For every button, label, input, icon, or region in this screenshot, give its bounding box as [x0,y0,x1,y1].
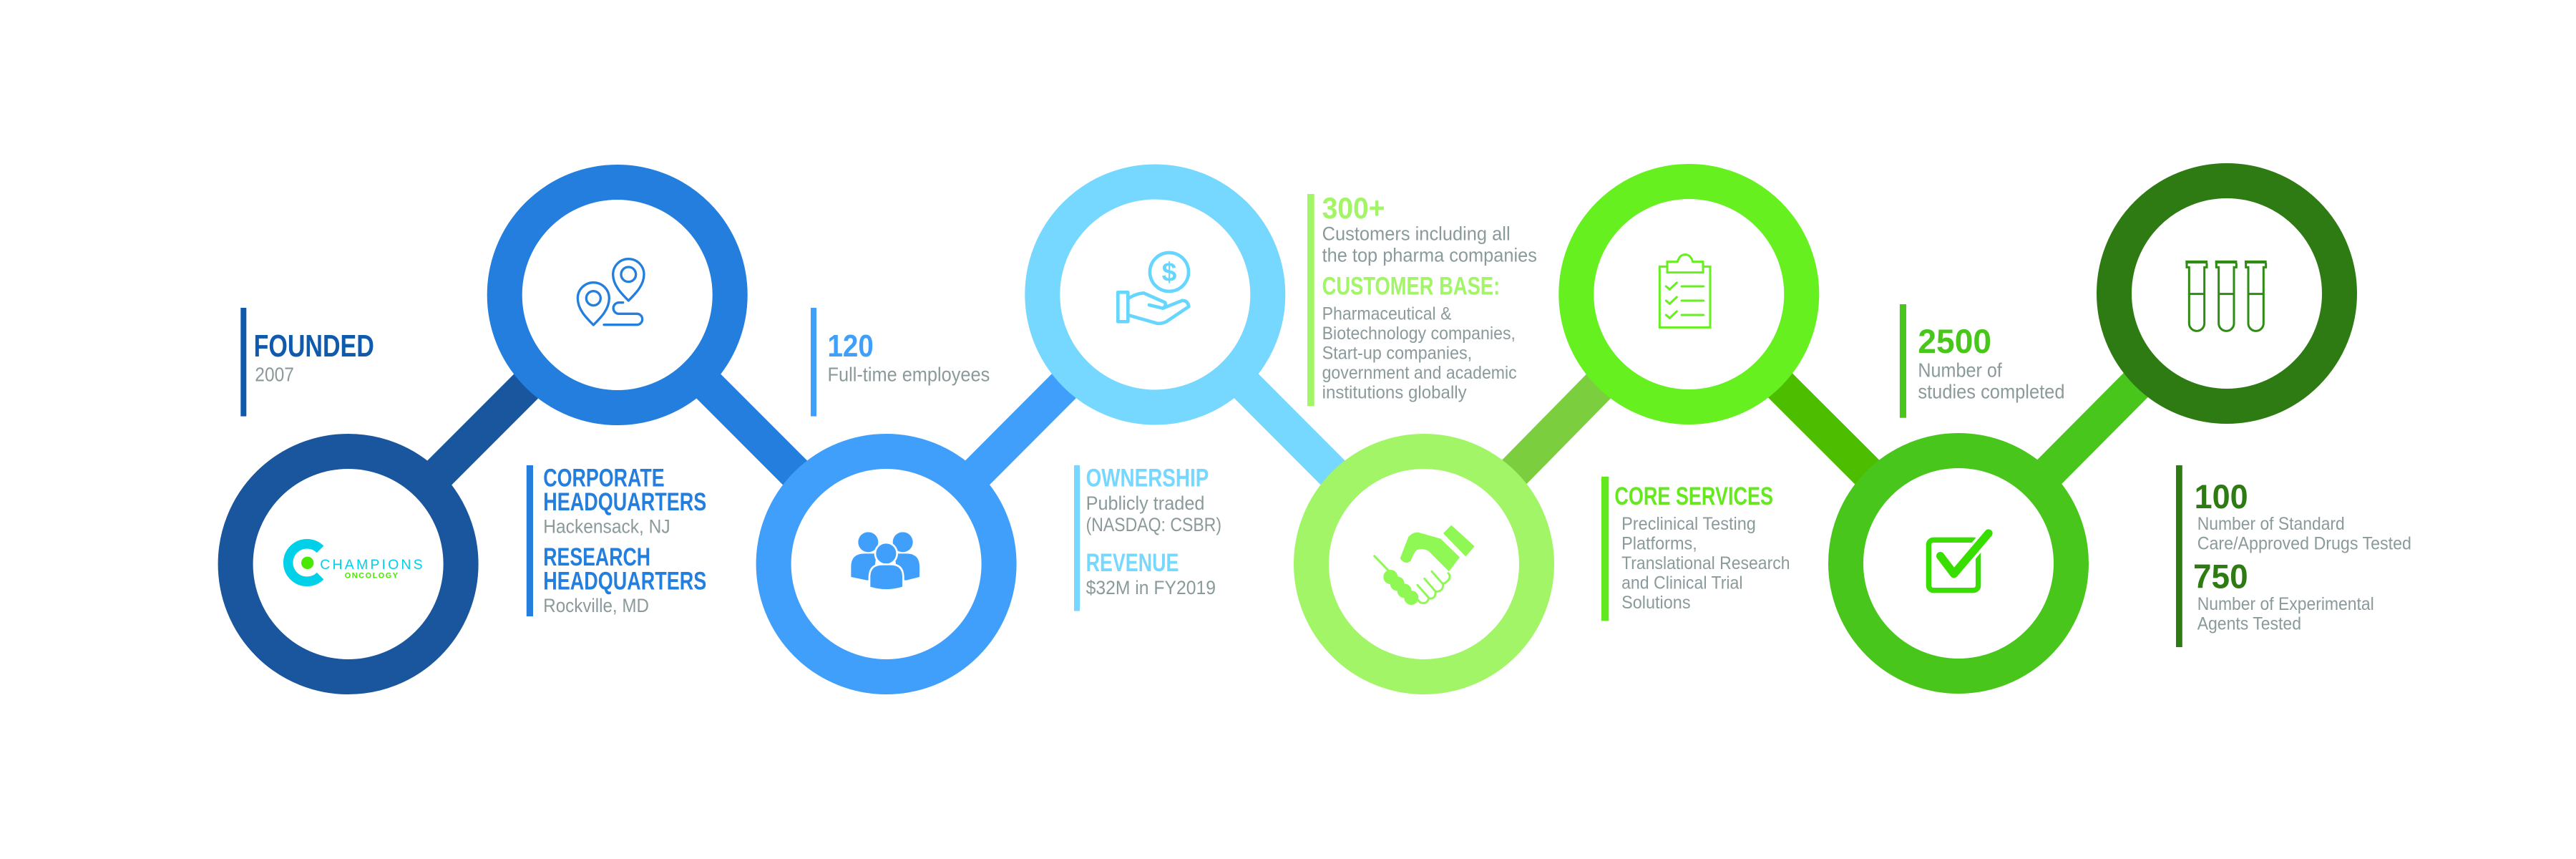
text block: studies: studies completed [1918,381,2065,403]
text block: core services: CORE SERVICES [1614,482,1773,510]
text block: studies: Number of [1918,359,2002,381]
text block: studies [1900,304,2065,418]
text block: customers: Customers including all [1322,223,1511,245]
text block: customers: CUSTOMER BASE: [1322,273,1500,301]
text block: ownership and revenue: (NASDAQ: CSBR) [1086,514,1221,535]
text block: headquarters [527,465,706,616]
text block: ownership and revenue: $32M in FY2019 [1086,577,1216,598]
icon: hand with coin: $ [1162,257,1177,287]
text block: core services: Translational Research [1621,553,1790,573]
text block: drugs tested: 750 [2193,557,2248,595]
text block: headquarters: HEADQUARTERS [543,488,706,516]
connector: circle 5 to 6 [1424,294,1689,564]
text block: headquarters: Hackensack, NJ [543,515,670,537]
text block: headquarters: HEADQUARTERS [543,567,706,596]
text block: customers: Biotechnology companies, [1322,324,1516,344]
connector: circle 1 to 2 [348,295,618,564]
text block: headquarters: CORPORATE [543,465,665,492]
text block: ownership and revenue: REVENUE [1086,549,1179,577]
icon: people group [851,532,919,590]
logo: Champions Oncology: CHAMPIONS [320,557,423,573]
text block: customers: Start-up companies, [1322,344,1472,364]
text block: core services: Solutions [1621,593,1691,613]
ring: logo circle [235,451,461,677]
connector: circle 2 to 3 [618,295,887,564]
icon: hand with coin [1118,253,1189,324]
ring: services circle [1576,182,1802,407]
text block: core services: Platforms, [1621,533,1697,553]
text block: ownership and revenue: OWNERSHIP [1086,465,1209,492]
text block: drugs tested: Number of Experimental [2197,594,2374,614]
text block: customers: government and academic [1322,363,1517,383]
connector: circle 6 to 7 [1689,294,1958,563]
connector: circle 7 to 8 [1958,293,2227,563]
text block: drugs tested: Number of Standard [2197,514,2345,534]
text block: drugs tested [2176,465,2411,647]
ring: employees circle [774,451,999,677]
text block: core services: and Clinical Trial [1621,573,1743,593]
icon: clipboard checklist [1659,255,1710,327]
text block: founded [240,308,374,417]
icon: handshake [1375,526,1473,605]
text block: founded: FOUNDED [254,329,374,364]
text block: headquarters: RESEARCH [543,543,650,571]
text block: ownership and revenue [1074,465,1221,611]
text block: customers: Pharmaceutical & [1322,304,1452,324]
ring: revenue circle [1043,182,1268,407]
text block: employees [811,308,990,417]
text block: studies: 2500 [1918,322,1991,360]
ring: customers circle [1311,451,1537,677]
text block: employees: 120 [827,329,874,364]
ring: location circle [504,182,730,408]
icon: map pins [577,259,644,325]
text block: ownership and revenue: Publicly traded [1086,492,1205,514]
text block: customers: 300+ [1322,191,1385,225]
logo: Champions Oncology: ONCOLOGY [345,572,399,581]
text block: customers: the top pharma companies [1322,244,1537,266]
ring: drugs tested circle [2114,180,2340,407]
text block: drugs tested: Care/Approved Drugs Tested [2197,533,2411,553]
icon: checkbox [1928,533,1989,591]
text block: employees: Full-time employees [827,364,990,386]
text block: headquarters: Rockville, MD [543,595,649,616]
text block: customers [1307,191,1537,406]
text block: core services: Preclinical Testing [1621,514,1756,534]
connector: circle 3 to 4 [887,295,1155,564]
text block: core services [1601,477,1790,621]
text block: drugs tested: Agents Tested [2197,614,2301,634]
logo: Champions Oncology [288,544,423,581]
ring: studies circle [1846,451,2071,676]
text block: customers: institutions globally [1322,383,1467,403]
text block: drugs tested: 100 [2195,477,2248,515]
connector: circle 4 to 5 [1155,295,1424,564]
text block: founded: 2007 [255,364,294,386]
icon: test tubes [2185,262,2267,331]
